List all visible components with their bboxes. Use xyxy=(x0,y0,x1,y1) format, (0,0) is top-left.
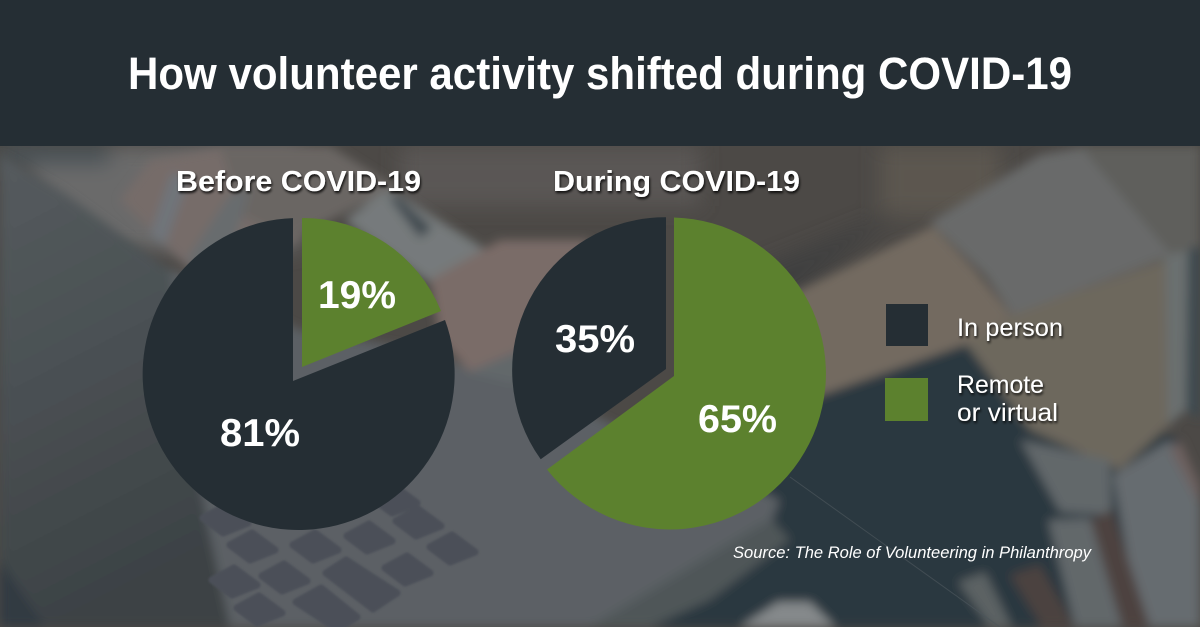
slice: remote 19% xyxy=(302,218,441,367)
value: 19%: 19% xyxy=(318,274,396,317)
background photo: hands on a laptop xyxy=(0,146,1200,627)
forearm xyxy=(790,226,1015,405)
legend label: in person: In person xyxy=(957,314,1063,342)
table edge highlight xyxy=(790,477,1000,627)
laptop lid xyxy=(0,155,230,627)
laptop body xyxy=(168,269,784,627)
legend label: remote or virtual: or virtual xyxy=(957,399,1058,427)
title: How volunteer activity shifted during COVID-19 xyxy=(128,48,1072,99)
fingers xyxy=(430,240,590,372)
pie heading: during: During COVID-19 xyxy=(553,166,800,198)
source note: Source: The Role of Volunteering in Philanthropy xyxy=(733,543,1092,562)
slice: in person 35% xyxy=(512,217,666,459)
small white device xyxy=(740,602,835,627)
pie heading: before: Before COVID-19 xyxy=(176,166,421,198)
pie chart: before COVID-19 xyxy=(143,166,455,530)
hands on keyboard xyxy=(120,146,310,270)
sweater cuff xyxy=(930,146,1175,315)
legend swatch: in person xyxy=(886,304,928,346)
value: 81%: 81% xyxy=(220,412,300,455)
value: 65%: 65% xyxy=(698,398,777,441)
card in hand xyxy=(344,188,485,285)
slice: in person 81% xyxy=(143,218,455,530)
legend label: remote or virtual xyxy=(957,371,1058,427)
pie chart: during COVID-19 xyxy=(512,166,826,529)
legend label: remote or virtual: Remote xyxy=(957,371,1044,399)
legend xyxy=(885,304,1063,427)
legend swatch: remote xyxy=(885,378,928,421)
value: 35%: 35% xyxy=(555,318,635,361)
slice: remote 65% xyxy=(547,218,826,529)
dark table xyxy=(658,346,1175,627)
header band xyxy=(0,0,1200,146)
fabric folds xyxy=(1020,440,1112,515)
keyboard keys xyxy=(230,533,275,560)
